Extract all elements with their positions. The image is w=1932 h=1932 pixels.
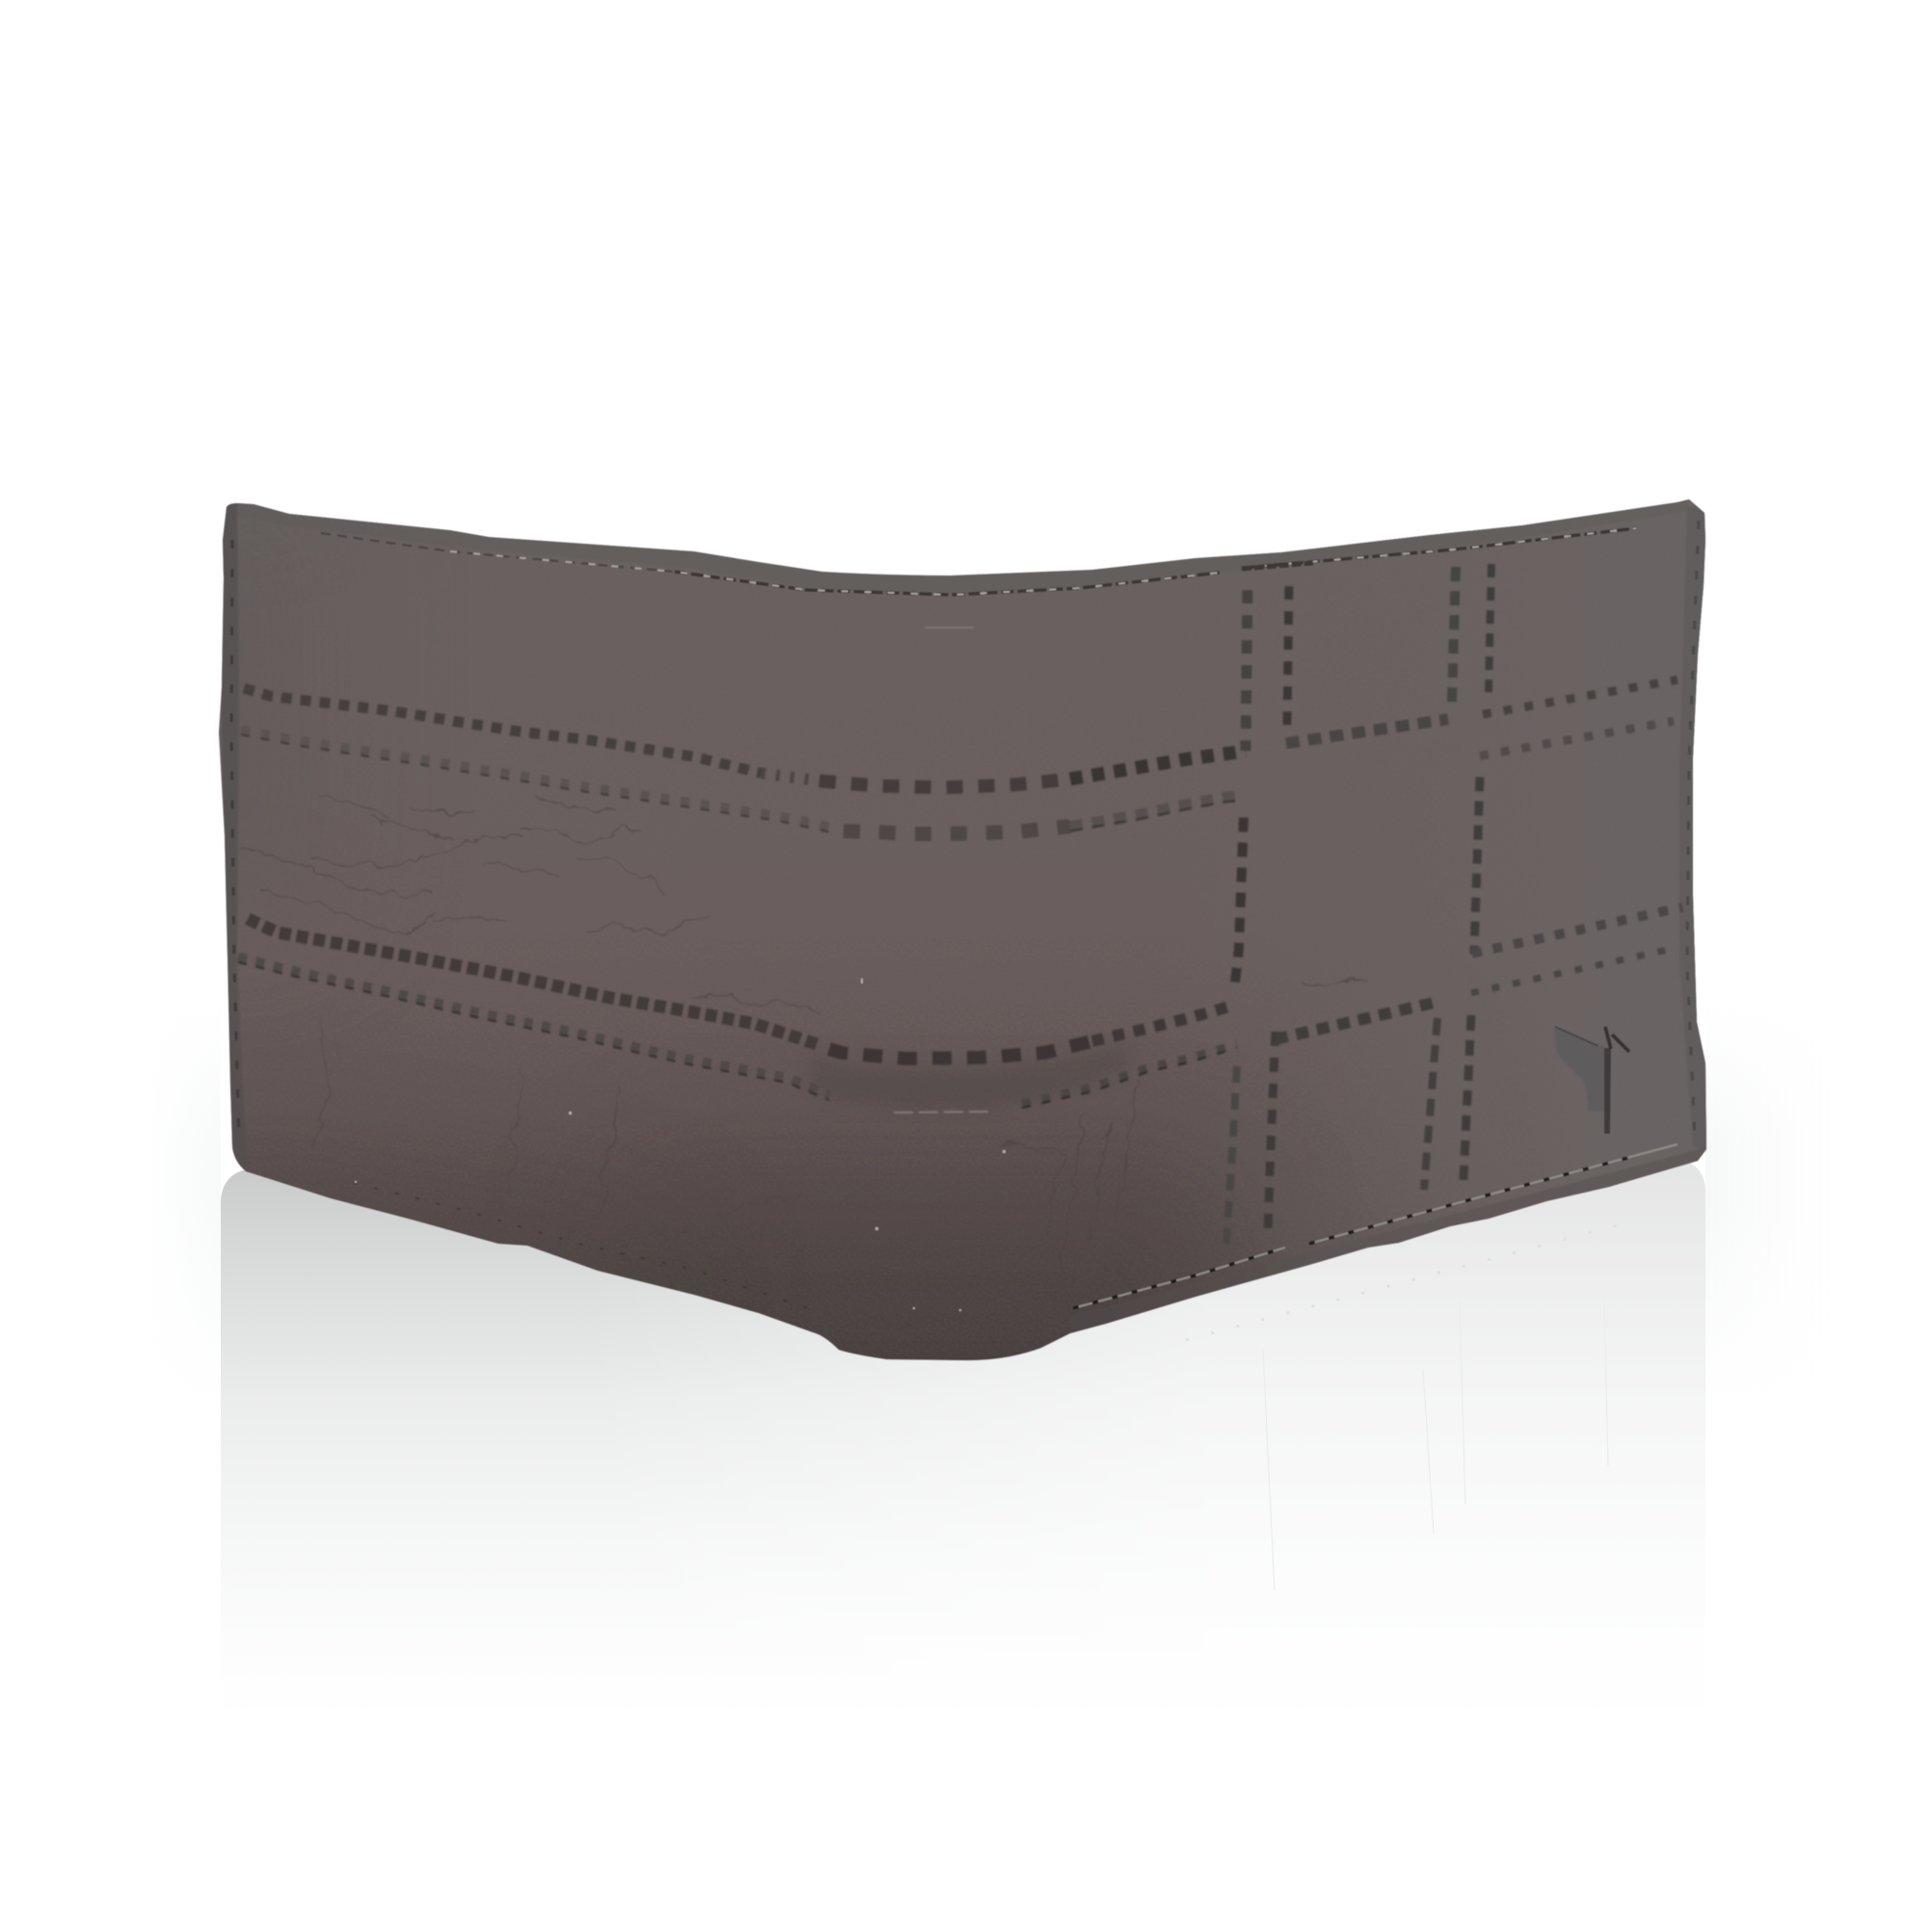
icon: embossed brand mark [1554, 1027, 1629, 1134]
leather cracks [241, 791, 1369, 1292]
row B [241, 730, 839, 829]
soft side glow on the surface [1705, 1140, 1708, 1217]
leather base [212, 492, 1716, 1369]
row A [244, 688, 762, 773]
vertical V1 [1246, 590, 1248, 751]
wallet body [218, 498, 1707, 1361]
lower left stitch [354, 1183, 807, 1308]
row C [248, 919, 817, 1044]
perforated stitch bands: right panel [1226, 564, 1682, 1244]
vertical V4 [1489, 564, 1491, 692]
top edge band [241, 503, 1670, 577]
left edge band [222, 503, 245, 1165]
side stitches [231, 540, 239, 1147]
edge stitching [231, 521, 1699, 1308]
bottom stitch [1073, 1144, 1677, 1308]
left cool tone [219, 714, 223, 790]
horizontal segments [1286, 719, 1448, 743]
fold shading [679, 1176, 1186, 1360]
product scene: wallet with reflection [218, 498, 1708, 1591]
wallet floor reflection [221, 1162, 1705, 1718]
dark band between lower rows [818, 1051, 1122, 1103]
perforated stitch bands: left panel [238, 688, 1246, 1113]
row D [238, 957, 829, 1095]
grain texture [212, 492, 1716, 1369]
top stitch [321, 533, 675, 572]
vertical V3 [1452, 567, 1456, 702]
pale flecks on leather [355, 627, 1006, 1311]
vertical V2 [1287, 586, 1289, 727]
right edge band [1680, 507, 1706, 1148]
